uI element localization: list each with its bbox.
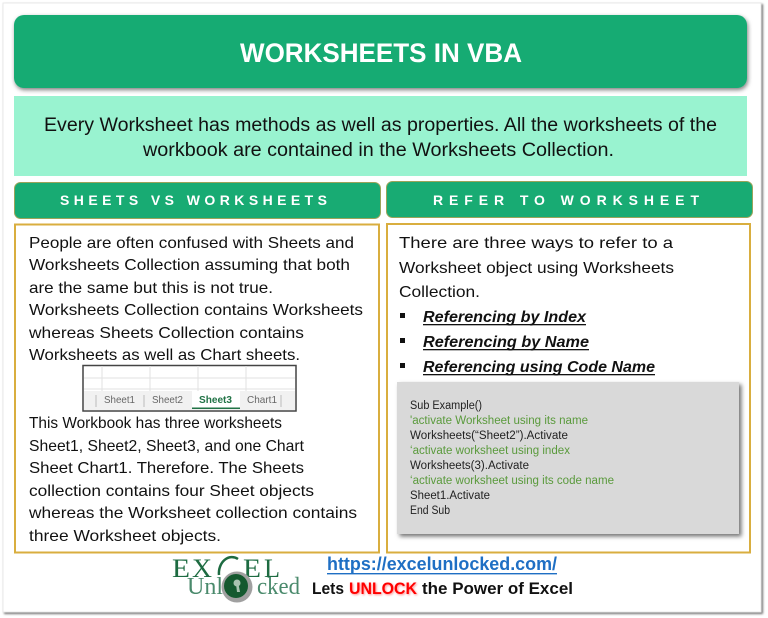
- tagline: Lets: [312, 579, 344, 598]
- intro text block: Every Worksheet has methods as well as properties. All the worksheets of the: [44, 115, 717, 136]
- code box: Sub Example(): [410, 400, 482, 412]
- panel: refer to worksheet: [387, 224, 750, 552]
- paragraph: workbook example: [28, 415, 357, 545]
- code box: Worksheets(3).Activate: [410, 460, 529, 472]
- heading: refer to worksheet: REFER TO WORKSHEET: [433, 192, 699, 208]
- paragraph: workbook example: three Worksheet objects.: [29, 528, 221, 545]
- logo: Excel Unlocked: [172, 554, 300, 602]
- code box: [397, 382, 739, 534]
- heading: refer to worksheet: [386, 182, 752, 218]
- logo: Excel Unlocked: E: [172, 554, 190, 583]
- bullet list: [400, 309, 655, 376]
- sheet tabs screenshot: Sheet1: [104, 394, 135, 406]
- tagline: UNLOCK: [349, 579, 418, 598]
- panel: sheets vs worksheets: [15, 224, 379, 552]
- logo: Excel Unlocked: L: [264, 554, 280, 583]
- code box: ‘activate worksheet using its code name: [410, 475, 614, 487]
- code box: Worksheets(“Sheet2”).Activate: [410, 430, 568, 442]
- sheet tabs screenshot: [83, 366, 296, 411]
- code box: End Sub: [410, 505, 450, 517]
- paragraph: workbook example: Sheet Chart1. Therefore. The Sheets: [29, 460, 304, 477]
- paragraph: sheets confusion: People are often confused with Sheets and: [29, 235, 354, 252]
- title banner: [14, 15, 747, 88]
- paragraph: three ways: Worksheet object using Worksheets: [399, 260, 674, 277]
- tagline: [312, 579, 573, 598]
- sheet tabs screenshot: Sheet2: [152, 394, 183, 406]
- paragraph: workbook example: This Workbook has three worksheets: [29, 415, 282, 432]
- logo: Excel Unlocked: E: [243, 554, 261, 583]
- paragraph: sheets confusion: whereas Sheets Collection contains: [28, 325, 304, 342]
- tagline: the Power of Excel: [422, 579, 573, 598]
- paragraph: three ways: [399, 235, 674, 301]
- paragraph: workbook example: whereas the Worksheet collection contains: [28, 505, 357, 522]
- code box: 'activate Worksheet using its name: [410, 415, 588, 427]
- paragraph: workbook example: collection contains four Sheet objects: [29, 483, 314, 500]
- logo: Excel Unlocked: Unl: [187, 574, 223, 600]
- bullet list: Referencing using Code Name: [423, 359, 655, 376]
- code box: Sheet1.Activate: [410, 490, 490, 502]
- sheet tabs screenshot: Sheet3: [199, 394, 232, 406]
- paragraph: sheets confusion: Worksheets Collection contains Worksheets: [29, 302, 363, 319]
- sheet tabs screenshot: Chart1: [247, 394, 277, 406]
- code box: ‘activate worksheet using index: [410, 445, 570, 457]
- paragraph: sheets confusion: are the same but this is not true.: [29, 280, 273, 297]
- paragraph: three ways: Collection.: [399, 284, 480, 301]
- paragraph: workbook example: Sheet1, Sheet2, Sheet3, and one Chart: [29, 438, 305, 455]
- bullet list: Referencing by Name: [423, 334, 589, 351]
- intro text block: workbook are contained in the Worksheets Collection.: [142, 140, 614, 161]
- intro text block: [14, 96, 747, 176]
- bullet list: Referencing by Index: [423, 309, 587, 326]
- paragraph: sheets confusion: Worksheets Collection assuming that both: [29, 257, 350, 274]
- paragraph: three ways: There are three ways to refer to a: [399, 235, 673, 252]
- title banner: WORKSHEETS IN VBA: [240, 38, 522, 68]
- paragraph: sheets confusion: [28, 235, 363, 364]
- logo: Excel Unlocked: cked: [257, 574, 300, 600]
- heading: sheets vs worksheets: [14, 182, 380, 218]
- paragraph: sheets confusion: Worksheets as well as Chart sheets.: [29, 347, 300, 364]
- logo: Excel Unlocked: X: [192, 554, 212, 583]
- heading: sheets vs worksheets: SHEETS VS WORKSHEETS: [60, 192, 327, 208]
- link: website url: https://excelunlocked.com/: [327, 553, 557, 574]
